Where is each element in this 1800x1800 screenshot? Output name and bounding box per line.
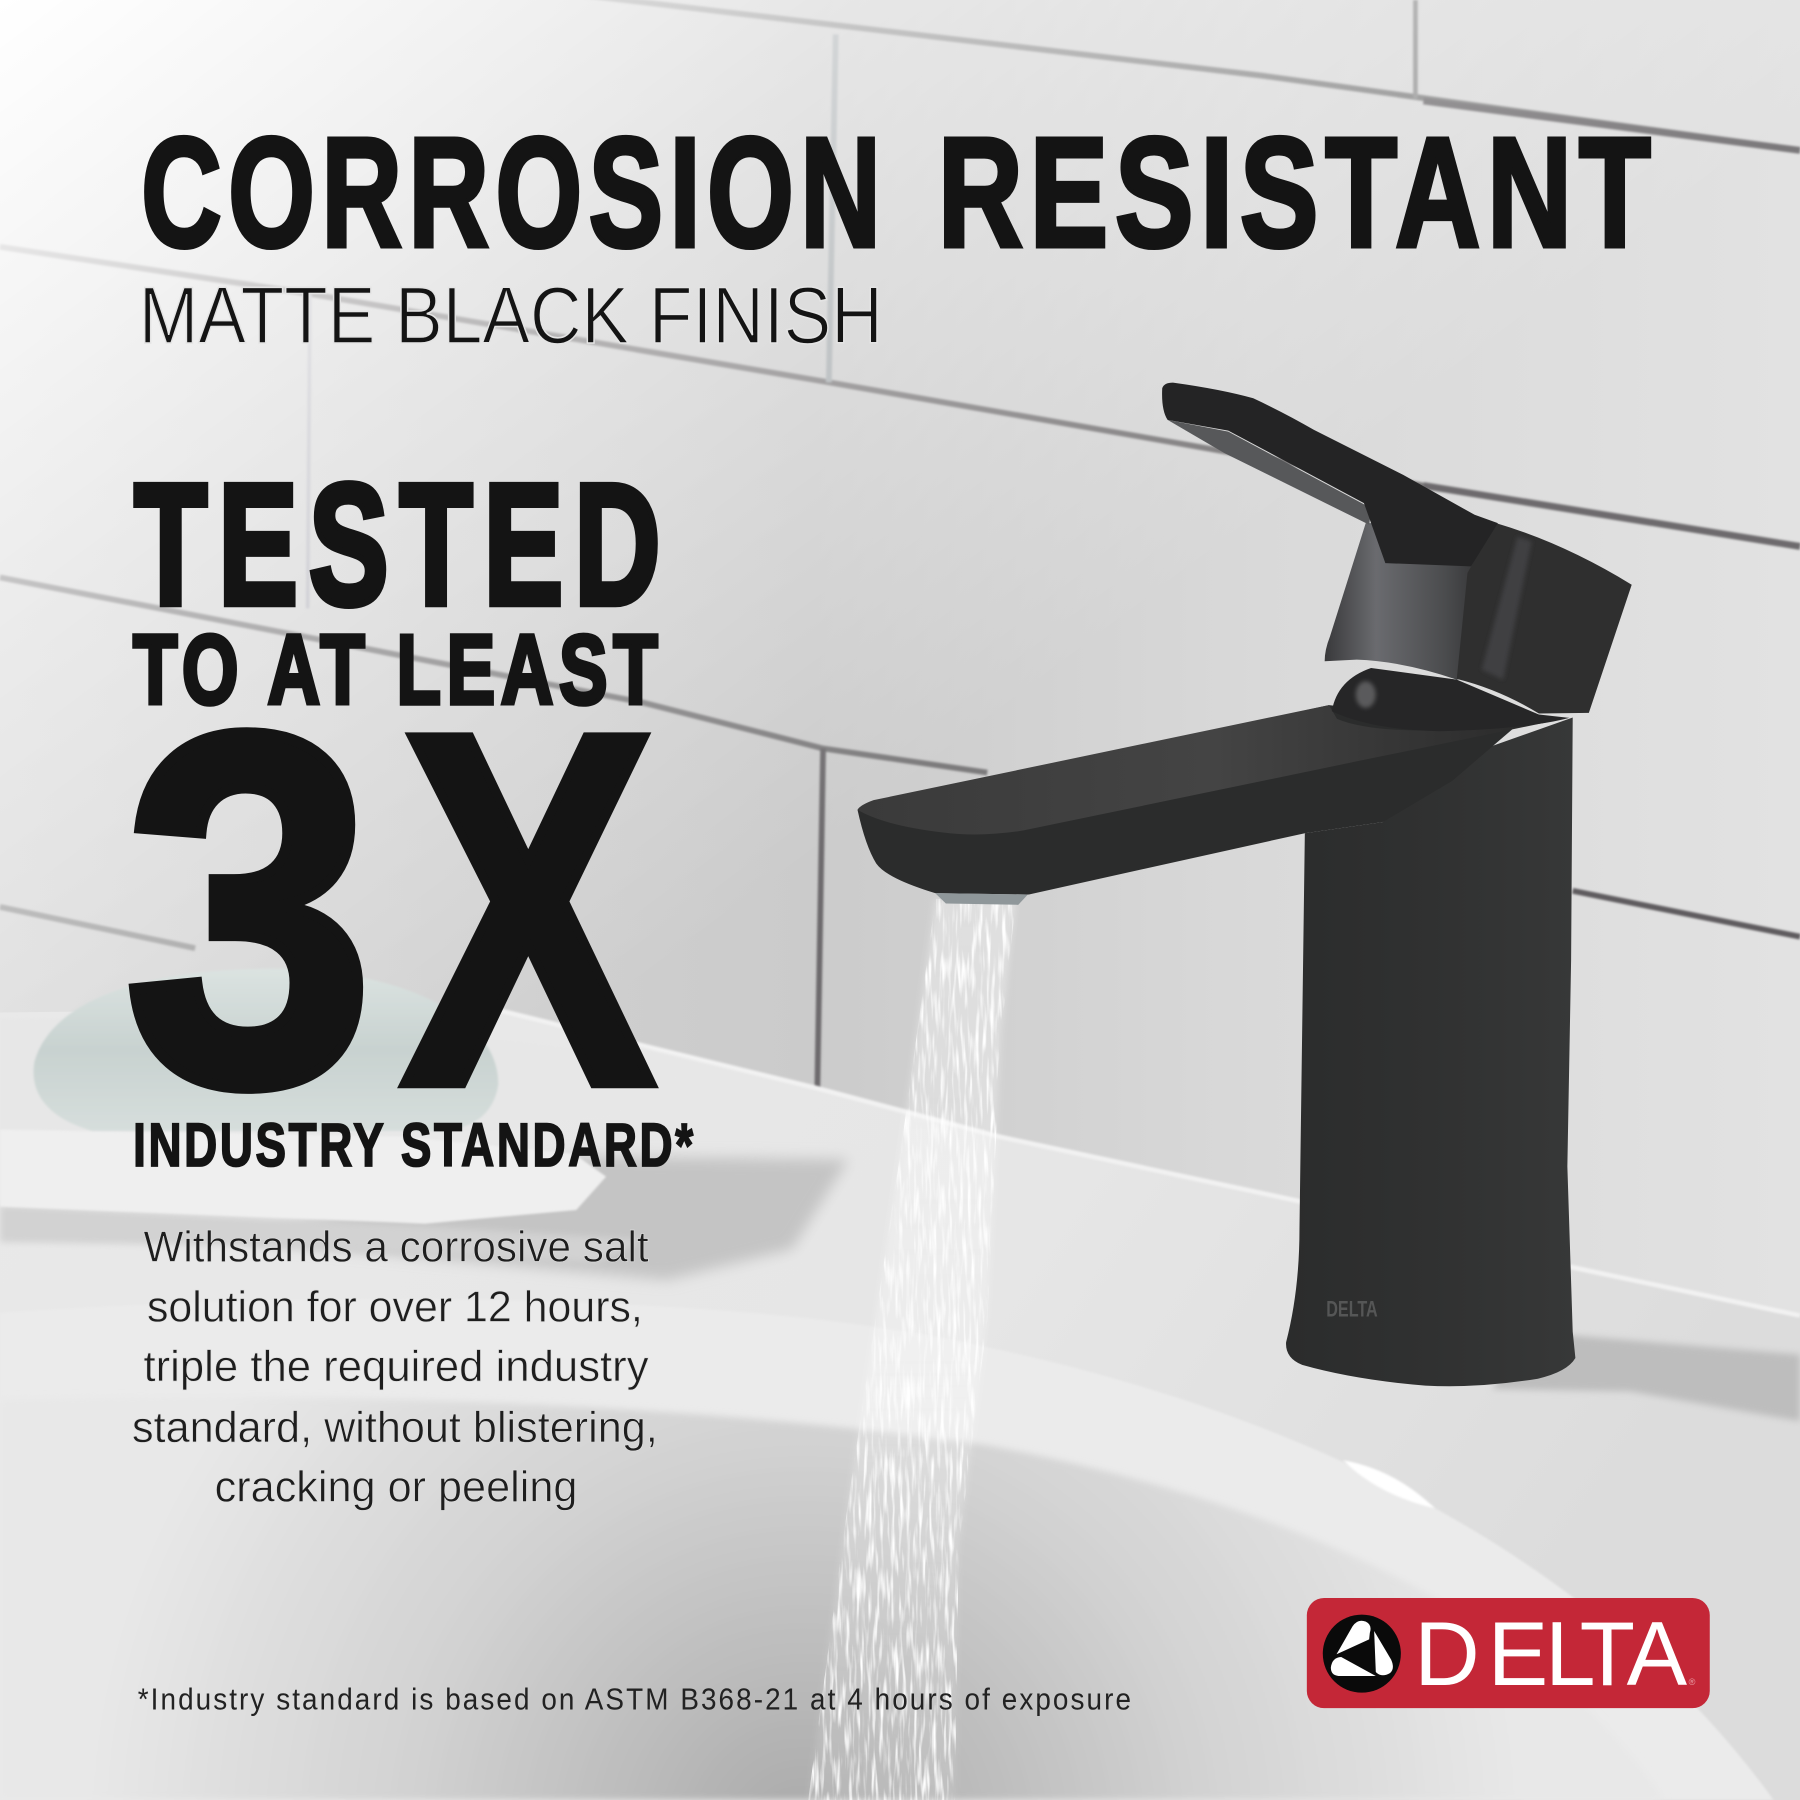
heading: corrosion resistant: CORROSION	[141, 106, 887, 280]
handle collar	[1325, 523, 1496, 680]
handle head	[1457, 523, 1632, 714]
faucet handle	[1162, 383, 1632, 731]
handle neck	[1332, 668, 1569, 731]
tile grout lines	[0, 0, 1800, 1088]
faucet spout	[857, 705, 1516, 894]
3X: 3	[124, 631, 374, 1190]
logo black circle with white triangle mark	[1323, 1615, 1401, 1693]
sink bowl	[0, 1397, 1665, 1800]
body text: triple the required industry	[143, 1343, 649, 1391]
tiled wall	[0, 0, 1800, 1332]
faucet base and spout	[857, 705, 1575, 1386]
body text: standard, without blistering,	[132, 1404, 658, 1452]
rim reflection	[1343, 1460, 1435, 1508]
DELTA mark on faucet: DELTA	[1326, 1298, 1378, 1322]
body text	[132, 1224, 658, 1512]
callout: tested to at least 3X industry standard	[124, 449, 696, 1190]
footnote: *Industry standard is based on ASTM B368-21 at 4 hours of exposure	[138, 1681, 1133, 1716]
Delta logo	[1307, 1598, 1710, 1708]
lever lower face	[1168, 420, 1371, 525]
heading: corrosion resistant	[141, 106, 1658, 280]
neck highlight	[1356, 681, 1376, 708]
faucet shadow on counter	[1492, 1332, 1800, 1421]
body text: solution for over 12 hours,	[147, 1283, 643, 1331]
3X	[124, 631, 656, 1190]
sink rim	[0, 1299, 1774, 1800]
3X: X	[402, 631, 656, 1190]
body text: cracking or peeling	[215, 1464, 577, 1512]
subheading: matte black finish: MATTE BLACK FINISH	[139, 271, 883, 361]
registered mark: ®	[1689, 1677, 1696, 1687]
soap bar	[34, 969, 498, 1131]
body text: Withstands a corrosive salt	[143, 1224, 649, 1272]
industry standard: INDUSTRY STANDARD*	[133, 1111, 696, 1179]
counter light edge	[484, 1007, 1800, 1316]
faucet body	[1286, 717, 1575, 1386]
black faucet	[857, 383, 1632, 1386]
top-left white wash	[0, 0, 1800, 1332]
spout top face	[857, 705, 1570, 834]
lever top face	[1162, 383, 1498, 566]
soap dish	[0, 1018, 848, 1280]
logo wordmark: DELTA	[1414, 1604, 1688, 1705]
head highlight stripe	[1482, 536, 1532, 680]
tested: TESTED	[134, 449, 672, 641]
logo red badge	[1307, 1598, 1710, 1708]
aerator	[935, 893, 1028, 905]
vanity counter	[0, 1007, 1800, 1800]
to at least: TO AT LEAST	[133, 615, 664, 725]
water stream	[808, 899, 1016, 1800]
